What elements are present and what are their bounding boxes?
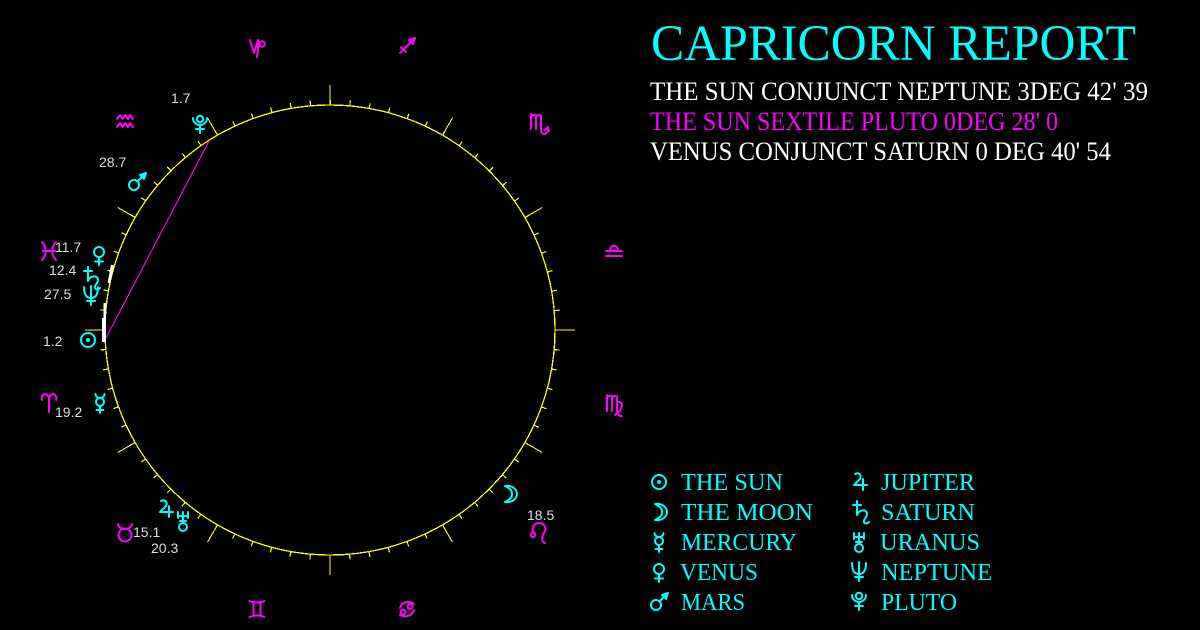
degree label: jupiter: 15.1: [133, 524, 160, 540]
sign boundary ticks: [85, 85, 575, 575]
degree label: mars: 28.7: [99, 154, 126, 170]
wheel ring: [105, 105, 555, 555]
zodiac sign: aquarius: [117, 115, 133, 127]
legend icon: saturn: [853, 501, 869, 524]
zodiac sign: cancer: [400, 602, 414, 616]
planet on wheel: mars: [129, 173, 146, 190]
planet on wheel: venus: [94, 247, 104, 265]
planet on wheel: mercury: [96, 394, 104, 413]
legend label: the moon: THE MOON: [681, 500, 813, 526]
legend label: uranus: URANUS: [880, 530, 980, 556]
legend icon: venus: [654, 564, 664, 582]
legend icon: moon: [655, 504, 667, 520]
planet on wheel: saturn: [84, 267, 100, 290]
legend label: mars: MARS: [681, 590, 745, 616]
degree label: sun: 1.2: [43, 333, 63, 349]
legend label: mercury: MERCURY: [681, 530, 797, 556]
planet on wheel: jupiter: [160, 500, 173, 517]
degree label: saturn: 12.4: [49, 262, 76, 278]
planet on wheel: uranus: [178, 512, 188, 531]
legend icon: mercury: [654, 533, 664, 552]
legend: [651, 470, 992, 616]
zodiac sign: pisces: [42, 242, 56, 260]
title: CAPRICORN REPORT: [651, 16, 1136, 72]
zodiac sign: capricorn: [250, 40, 265, 57]
planet on wheel: pluto: [193, 116, 207, 133]
sextile aspect line: [106, 141, 209, 338]
zodiac sign: virgo: [607, 395, 622, 416]
five degree ticks: [102, 102, 558, 558]
legend icon: neptune: [852, 562, 866, 581]
legend label: saturn: SATURN: [881, 500, 975, 526]
degree label: pluto: 1.7: [171, 90, 191, 106]
degree label: neptune: 27.5: [44, 286, 71, 302]
legend icon: uranus: [854, 533, 864, 552]
zodiac sign: aries: [42, 394, 56, 412]
conjunction arc: sun and neptune: [102, 303, 106, 342]
legend label: the sun: THE SUN: [681, 470, 783, 496]
legend label: pluto: PLUTO: [881, 590, 957, 616]
aspect line: venus conjunct saturn: VENUS CONJUNCT SATURN 0 DEG 40' 54: [650, 137, 1111, 166]
degree label: uranus: 20.3: [151, 540, 178, 556]
zodiac sign: scorpio: [531, 114, 549, 134]
zodiac sign: libra: [606, 246, 622, 256]
aspect line: sun conjunct neptune: THE SUN CONJUNCT NEPTUNE 3DEG 42' 39: [650, 77, 1148, 106]
legend label: venus: VENUS: [680, 560, 758, 586]
planet on wheel: sun: [81, 333, 95, 347]
legend label: jupiter: JUPITER: [881, 470, 975, 496]
degree label: mercury: 19.2: [55, 404, 82, 420]
planet on wheel: neptune: [84, 286, 98, 305]
zodiac sign: leo: [531, 523, 545, 543]
degree label: moon: 18.5: [527, 507, 554, 523]
zodiac sign: gemini: [250, 601, 264, 617]
zodiac sign: taurus: [118, 524, 132, 542]
legend icon: jupiter: [854, 473, 867, 490]
planet on wheel: moon: [505, 486, 517, 502]
legend icon: mars: [651, 593, 668, 610]
legend icon: pluto: [852, 593, 866, 610]
legend icon: sun: [652, 475, 666, 489]
zodiac wheel: [85, 85, 575, 575]
aspect line: sun sextile pluto: THE SUN SEXTILE PLUTO 0DEG 28' 0: [650, 107, 1058, 136]
legend label: neptune: NEPTUNE: [881, 560, 992, 586]
zodiac sign: sagittarius: [400, 38, 415, 53]
degree label: venus: 11.7: [55, 239, 81, 255]
conjunction arc: venus and saturn: [109, 265, 112, 283]
